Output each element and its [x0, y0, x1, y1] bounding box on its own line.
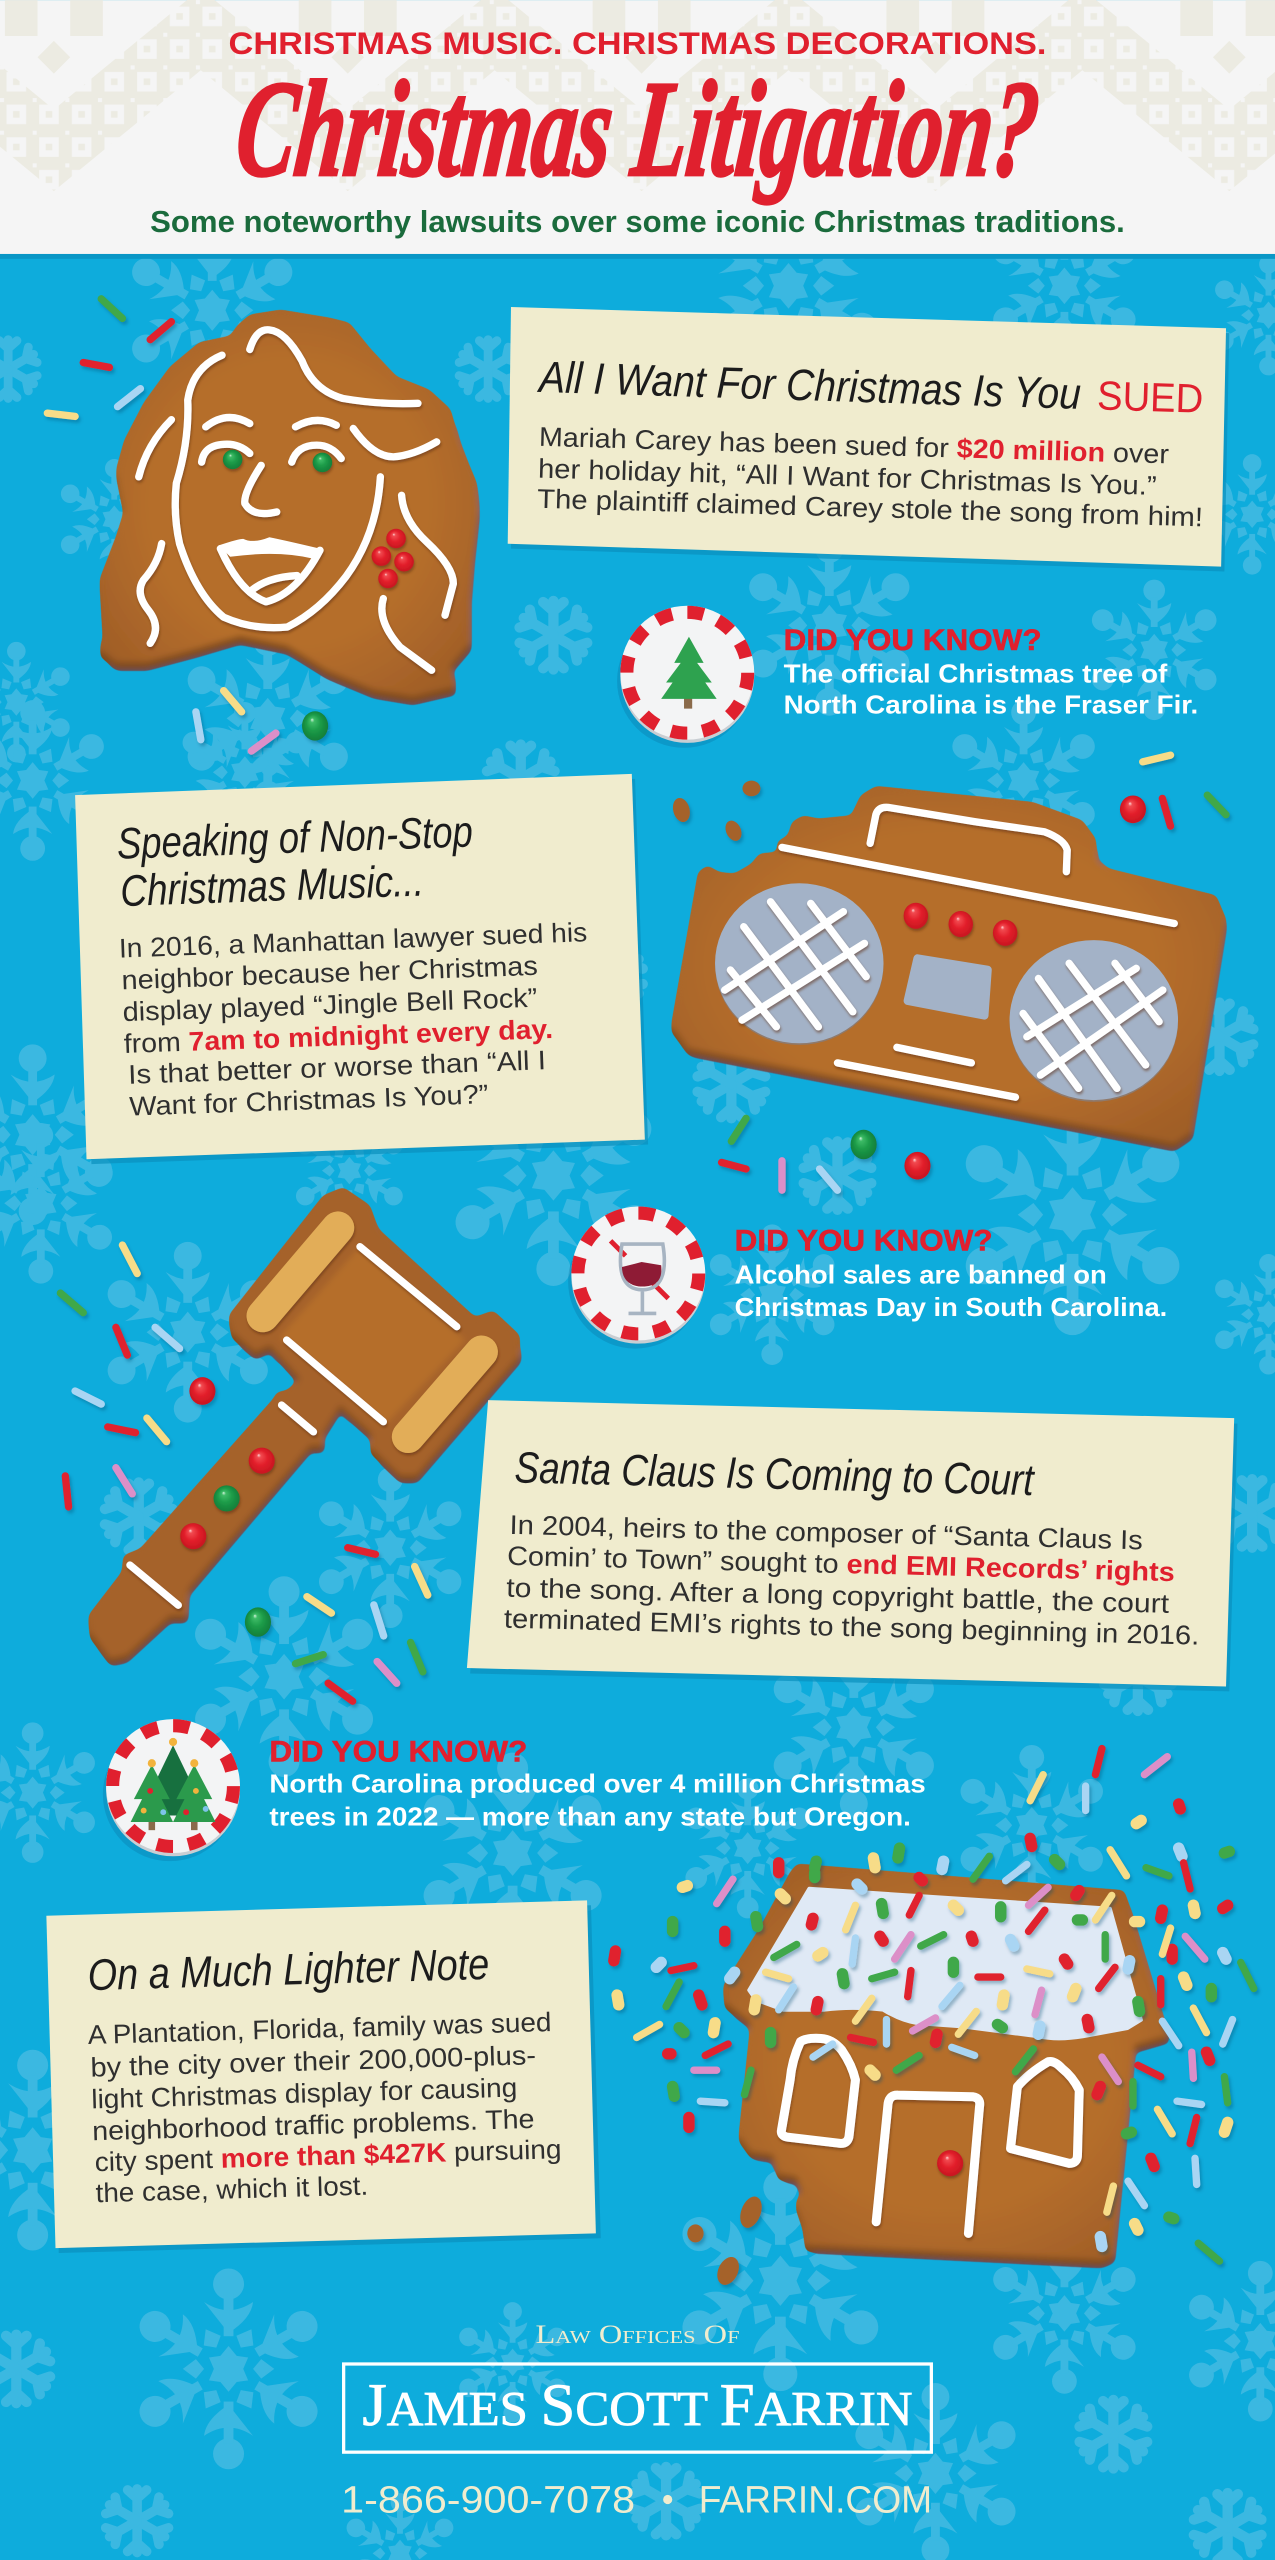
icing lines — [725, 807, 1174, 1097]
footer: law firm logo and contact — [341, 2320, 932, 2521]
did you know: alcohol sales: DID YOU KNOW? — [735, 1225, 993, 1258]
header panel — [0, 0, 1275, 259]
gingerbread cookie: gavel — [88, 1187, 528, 1678]
did you know: North Carolina trees: trees in 2022 — more than any state but Oregon. — [269, 1801, 911, 1831]
body text: to the song. After a long copyright battle, the court — [506, 1573, 1170, 1619]
sprinkles and crumbs around boombox — [670, 755, 1226, 1190]
did you know: North Carolina trees: DID YOU KNOW? — [269, 1736, 527, 1769]
windows and door — [781, 2038, 1079, 2233]
snow roof — [749, 1888, 1141, 2039]
did you know: Fraser Fir — [617, 606, 1198, 748]
gavel head stripes — [263, 1228, 482, 1437]
did you know: Fraser Fir: The official Christmas tree of — [784, 658, 1168, 688]
panel: much lighter note — [46, 1900, 601, 2253]
did you know: Fraser Fir: DID YOU KNOW? — [784, 624, 1042, 657]
heading: SUED — [1096, 372, 1204, 422]
body text: neighbor because her Christmas — [121, 951, 538, 995]
bullet — [663, 2495, 672, 2504]
body text: by the city over their 200,000-plus- — [90, 2040, 536, 2083]
sprinkles around gavel — [60, 1245, 428, 1701]
heading: On a Much Lighter Note — [87, 1940, 490, 2000]
heading — [116, 807, 475, 916]
header kicker: CHRISTMAS MUSIC. CHRISTMAS DECORATIONS. — [229, 25, 1046, 61]
body text: The plaintiff claimed Carey stole the song from him! — [537, 484, 1203, 532]
icing bands — [130, 1247, 457, 1605]
panel: Mariah Carey lawsuit — [508, 307, 1229, 571]
gingerbread cookie: boombox — [671, 786, 1236, 1165]
knit pattern band — [0, 0, 1275, 191]
logo kicker: Law Offices Of — [535, 2320, 740, 2349]
body text: terminated EMI’s rights to the song beginning in 2016. — [504, 1604, 1200, 1651]
body text: display played “Jingle Bell Rock” — [122, 983, 538, 1027]
heading: Santa Claus Is Coming to Court — [514, 1443, 1036, 1505]
subtitle: Some noteworthy lawsuits over some iconic Christmas traditions. — [150, 206, 1125, 239]
body text: from 7am to midnight every day. — [123, 1014, 553, 1059]
sprinkles on and around house — [614, 1749, 1254, 2288]
did you know: Fraser Fir: North Carolina is the Fraser Fir. — [784, 690, 1198, 720]
body text: In 2016, a Manhattan lawyer sued his — [118, 917, 588, 964]
icon: wine glass crossed — [611, 1241, 671, 1313]
body text: Is that better or worse than “All I — [128, 1045, 546, 1090]
did you know: alcohol sales — [568, 1207, 1167, 1349]
candy buttons — [180, 1448, 275, 1549]
body text — [87, 2007, 563, 2208]
heading: Christmas Music... — [119, 856, 425, 916]
lips — [219, 537, 320, 558]
did you know: alcohol sales: Alcohol sales are banned on — [735, 1259, 1107, 1289]
body text: In 2004, heirs to the composer of “Santa Claus Is — [509, 1510, 1143, 1555]
heading: Speaking of Non-Stop — [116, 807, 474, 869]
heading: All I Want For Christmas Is You — [536, 353, 1082, 419]
icon: three trees — [131, 1738, 215, 1830]
did you know: North Carolina trees: North Carolina produced over 4 million Christmas — [269, 1769, 926, 1799]
gavel head centre — [280, 1247, 465, 1427]
body text: Mariah Carey has been sued for $20 million over — [539, 422, 1169, 469]
body text — [504, 1510, 1202, 1651]
door knob — [937, 2150, 963, 2176]
sprinkles around cookie 1 — [47, 299, 328, 751]
body text: city spent more than $427K pursuing — [94, 2134, 562, 2177]
body text: her holiday hit, “All I Want for Christmas Is You.” — [538, 454, 1157, 501]
body text: light Christmas display for causing — [91, 2073, 518, 2114]
body text: the case, which it lost. — [95, 2171, 369, 2208]
gingerbread cookie: Mariah Carey — [100, 309, 486, 715]
website: FARRIN.COM — [699, 2479, 932, 2521]
body text — [118, 917, 593, 1122]
firm name: JAMES SCOTT FARRIN — [362, 2372, 913, 2439]
body text — [537, 422, 1205, 532]
panel: non-stop Christmas music — [75, 774, 648, 1164]
phone number: 1-866-900-7078 — [341, 2479, 635, 2521]
body text: Comin’ to Town” sought to end EMI Records’ rights — [507, 1541, 1175, 1587]
did you know: alcohol sales: Christmas Day in South Carolina. — [735, 1292, 1167, 1322]
body text: A Plantation, Florida, family was sued — [87, 2007, 552, 2050]
icing face lines — [139, 330, 453, 670]
body text: Want for Christmas Is You?” — [129, 1079, 489, 1122]
panel: Santa Claus is coming to court — [467, 1400, 1237, 1691]
body text: neighborhood traffic problems. The — [92, 2104, 535, 2146]
speakers and tape window — [715, 883, 1178, 1102]
candy buttons — [904, 903, 1017, 946]
icon: tree — [661, 637, 717, 709]
did you know: North Carolina trees — [103, 1719, 926, 1861]
logo box — [344, 2364, 931, 2452]
gingerbread cookie: house — [723, 1863, 1177, 2278]
eyes and earring — [223, 450, 414, 588]
